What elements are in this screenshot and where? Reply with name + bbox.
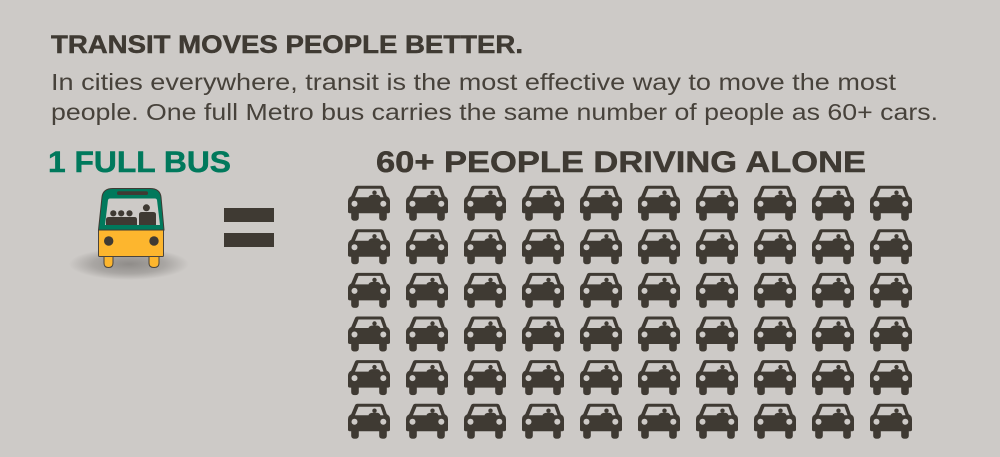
intro text: people. One full Metro bus carries the same number of people as 60+ cars. xyxy=(51,99,938,125)
car grid xyxy=(348,186,912,439)
intro text: In cities everywhere, transit is the most effective way to move the most xyxy=(51,69,897,95)
heading: 60+ people driving alone: 60+ PEOPLE DRIVING ALONE xyxy=(376,146,866,179)
icon: bus xyxy=(69,188,189,280)
title: TRANSIT MOVES PEOPLE BETTER. xyxy=(51,31,523,59)
intro text xyxy=(51,69,938,125)
equals sign xyxy=(224,208,274,247)
heading: 1 full bus: 1 FULL BUS xyxy=(48,146,231,179)
